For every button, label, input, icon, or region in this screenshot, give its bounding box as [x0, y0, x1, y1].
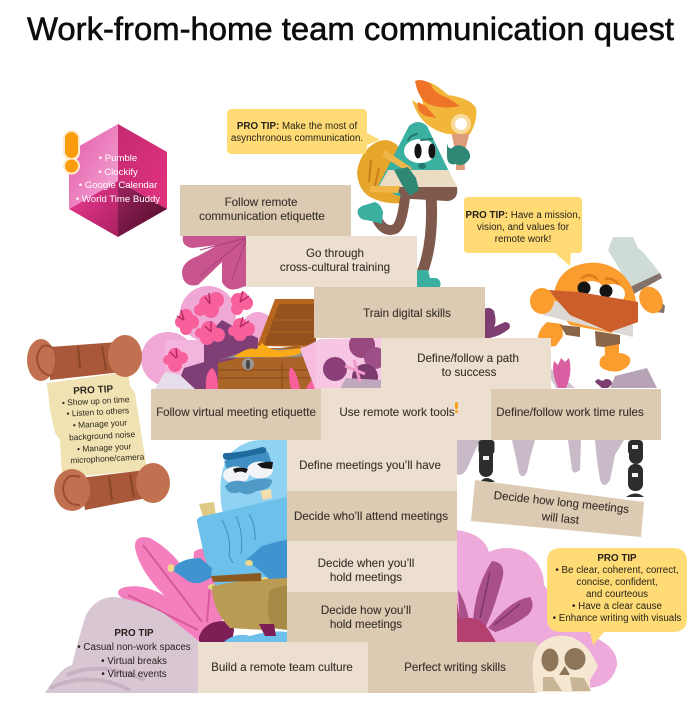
panel: how to hold meetings: Decide how you’ll: [321, 604, 411, 617]
panel: tools hexagon: [69, 124, 167, 237]
panel: follow remote communication etiquette: Follow remote: [225, 196, 297, 209]
panel: pro tip rock: • Virtual breaks: [101, 656, 167, 667]
panel: who will attend: Decide who’ll attend meetings: [294, 510, 448, 523]
panel: define meetings: [287, 440, 457, 491]
panel: pro tip scroll: [27, 335, 170, 511]
panel: pro tip scroll: • Show up on time: [62, 394, 130, 408]
panel: pro tip scroll: • Manage your: [77, 441, 132, 454]
panel: tilted meeting length: will last: [540, 510, 580, 527]
body: [553, 263, 637, 333]
legs: [538, 322, 563, 346]
panel: tools hexagon: • Google Calendar: [79, 180, 158, 191]
callout: pro tip writing: • Have a clear cause: [572, 601, 663, 612]
plants: pink flower tree: [141, 286, 274, 389]
panel: how to hold meetings: [287, 592, 457, 642]
callout: pro tip mission: [464, 197, 582, 266]
plant: pink leaf lower left: [118, 537, 234, 642]
brows and eyes: [582, 275, 620, 287]
panel: cross-cultural training: cross-cultural training: [280, 261, 390, 274]
callout: pro tip writing: • Be clear, coherent, correct,: [555, 565, 679, 576]
body: [378, 122, 456, 201]
callout: pro tip writing: and courteous: [586, 589, 648, 600]
panel: tilted meeting length: [471, 480, 644, 537]
plants: purple berries: [300, 332, 386, 390]
plants and rock: right of path block: [551, 358, 657, 388]
icon: treasure chest: [218, 299, 335, 389]
bottom roller: [54, 463, 170, 511]
panel: pro tip scroll: microphone/camera: [70, 451, 145, 465]
callout: pro tip mission: remote work!: [495, 234, 551, 245]
panel: pro tip rock: • Virtual events: [101, 669, 167, 680]
callout: pro tip asynchronous: asynchronous communication.: [231, 133, 363, 144]
rear leg: [378, 197, 405, 230]
panel: define path to success: to success: [442, 366, 497, 379]
plant: purple sprout behind digital skills: [484, 308, 510, 338]
front leg: [421, 195, 432, 275]
callout: pro tip writing: concise, confident,: [576, 577, 658, 588]
panel: define work time rules: Define/follow work time rules: [496, 406, 644, 419]
panel: cross-cultural training: [246, 236, 417, 287]
panel: tools hexagon: • Pumble: [99, 153, 137, 164]
panel: pro tip rock: [45, 597, 200, 693]
panel: perfect writing skills: Perfect writing skills: [404, 661, 506, 674]
panel: pro tip scroll: PRO TIP: [73, 384, 114, 397]
panel: follow virtual meeting etiquette: [151, 389, 321, 440]
backpack: [357, 140, 405, 203]
bandana: [543, 300, 633, 337]
panel: follow remote communication etiquette: communication etiquette: [199, 210, 325, 223]
panel: when to hold meetings: hold meetings: [330, 571, 402, 584]
title: Work-from-home team communication quest: [27, 11, 674, 47]
plant: upper magenta leaf: [182, 236, 246, 290]
panel: tools hexagon: • World Time Buddy: [76, 194, 160, 205]
panel: who will attend: [287, 491, 457, 541]
panel: how to hold meetings: hold meetings: [330, 618, 402, 631]
hand: [394, 167, 419, 196]
strap: [370, 150, 412, 193]
stalactites and chains: [457, 440, 644, 497]
panel: tilted meeting length: Decide how long meetings: [493, 489, 630, 516]
panel: use remote work tools: Use remote work tools: [339, 406, 455, 419]
top roller: [27, 335, 142, 381]
callout: pro tip asynchronous: [227, 109, 380, 154]
callout: pro tip writing: [547, 548, 687, 645]
character: orange bandit with sword: [530, 237, 668, 371]
character: blue bearded creature: [168, 440, 287, 642]
panel: cross-cultural training: Go through: [306, 247, 364, 260]
hands: [530, 288, 554, 314]
callout: pro tip mission: vision, and values for: [477, 222, 570, 233]
panel: define meetings: Define meetings you’ll have: [299, 459, 441, 472]
panel: train digital skills: Train digital skills: [363, 307, 451, 320]
torch: [451, 131, 470, 170]
icon: skull: [533, 636, 598, 692]
callout: pro tip mission: PRO TIP: Have a mission,: [466, 210, 580, 221]
panel: pro tip scroll: • Listen to others: [66, 405, 129, 418]
panel: define path to success: [381, 338, 551, 389]
panel: pro tip scroll: • Manage your: [73, 417, 127, 430]
callout: pro tip asynchronous: PRO TIP: Make the most of: [237, 121, 357, 132]
panel: tools hexagon: • Clockify: [98, 167, 138, 178]
plant bush lower right: [457, 530, 617, 688]
panel: define work time rules: [491, 389, 661, 440]
panel: train digital skills: [314, 287, 485, 338]
panel: use remote work tools: [321, 388, 491, 440]
panel: follow remote communication etiquette: [180, 185, 351, 236]
panel: follow virtual meeting etiquette: Follow virtual meeting etiquette: [156, 406, 316, 419]
character: teal triangle adventurer: [357, 80, 476, 289]
eyes: [404, 139, 436, 163]
callout: pro tip writing: PRO TIP: [597, 553, 637, 564]
panel: perfect writing skills: [368, 642, 537, 693]
sword: [608, 237, 660, 287]
icon: exclamation mark: [63, 130, 80, 174]
panel: when to hold meetings: [287, 541, 457, 592]
panel: define path to success: Define/follow a path: [417, 352, 519, 365]
panel: build remote team culture: [198, 642, 368, 693]
panel: pro tip rock: PRO TIP: [114, 628, 154, 639]
callout: pro tip writing: • Enhance writing with visuals: [553, 613, 681, 624]
panel: when to hold meetings: Decide when you’ll: [318, 557, 414, 570]
panel: build remote team culture: Build a remote team culture: [211, 661, 353, 674]
panel: pro tip rock: • Casual non-work spaces: [77, 642, 191, 653]
panel: pro tip scroll: background noise: [69, 429, 136, 442]
